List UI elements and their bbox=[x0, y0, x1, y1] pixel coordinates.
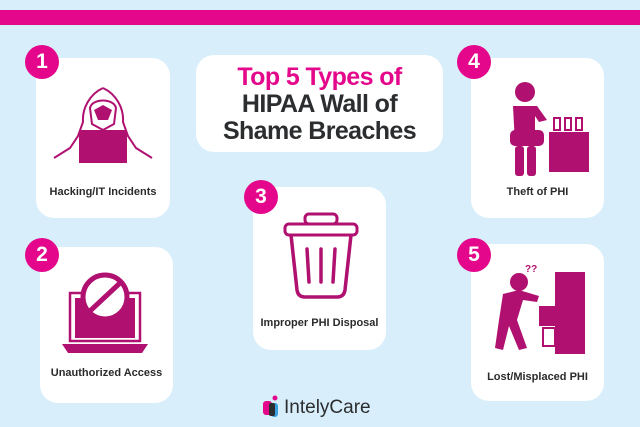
icon: thief bbox=[510, 82, 589, 176]
badge 1: 1 bbox=[36, 50, 48, 73]
badge 3 bbox=[244, 180, 278, 214]
top bar bbox=[0, 10, 640, 25]
title: Shame Breaches bbox=[223, 117, 416, 145]
badge 3: 3 bbox=[255, 185, 267, 208]
panel: 2 unauthorized bbox=[40, 247, 173, 403]
brand text: IntelyCare bbox=[284, 397, 371, 418]
icon: trash can bbox=[284, 212, 358, 299]
title card bbox=[196, 55, 443, 152]
badge 4 bbox=[457, 45, 491, 79]
title: Top 5 Types of bbox=[237, 63, 402, 91]
icon: searching cabinet bbox=[495, 264, 585, 354]
badge 5 bbox=[457, 238, 491, 272]
label: Unauthorized Access bbox=[51, 367, 162, 379]
panel: 5 lost bbox=[471, 244, 604, 401]
badge 2 bbox=[25, 238, 59, 272]
badge 5: 5 bbox=[468, 243, 480, 266]
title: HIPAA Wall of bbox=[242, 90, 397, 118]
label: Theft of PHI bbox=[507, 186, 568, 198]
label: Lost/Misplaced PHI bbox=[487, 371, 588, 383]
badge 4: 4 bbox=[468, 50, 480, 73]
panel: 4 theft bbox=[471, 58, 604, 218]
badge 1 bbox=[25, 45, 59, 79]
title bbox=[223, 63, 416, 145]
badge 2: 2 bbox=[36, 243, 48, 266]
logo bbox=[263, 396, 371, 418]
panel: 1 hacking bbox=[36, 58, 170, 218]
panel: 3 disposal bbox=[253, 187, 386, 350]
icon: laptop blocked bbox=[62, 272, 148, 353]
label: Improper PHI Disposal bbox=[260, 317, 378, 329]
icon: hacker bbox=[54, 87, 152, 163]
icon: logo mark bbox=[263, 396, 278, 417]
label: Hacking/IT Incidents bbox=[50, 186, 156, 198]
icon: searching cabinet: ?? bbox=[525, 264, 537, 275]
